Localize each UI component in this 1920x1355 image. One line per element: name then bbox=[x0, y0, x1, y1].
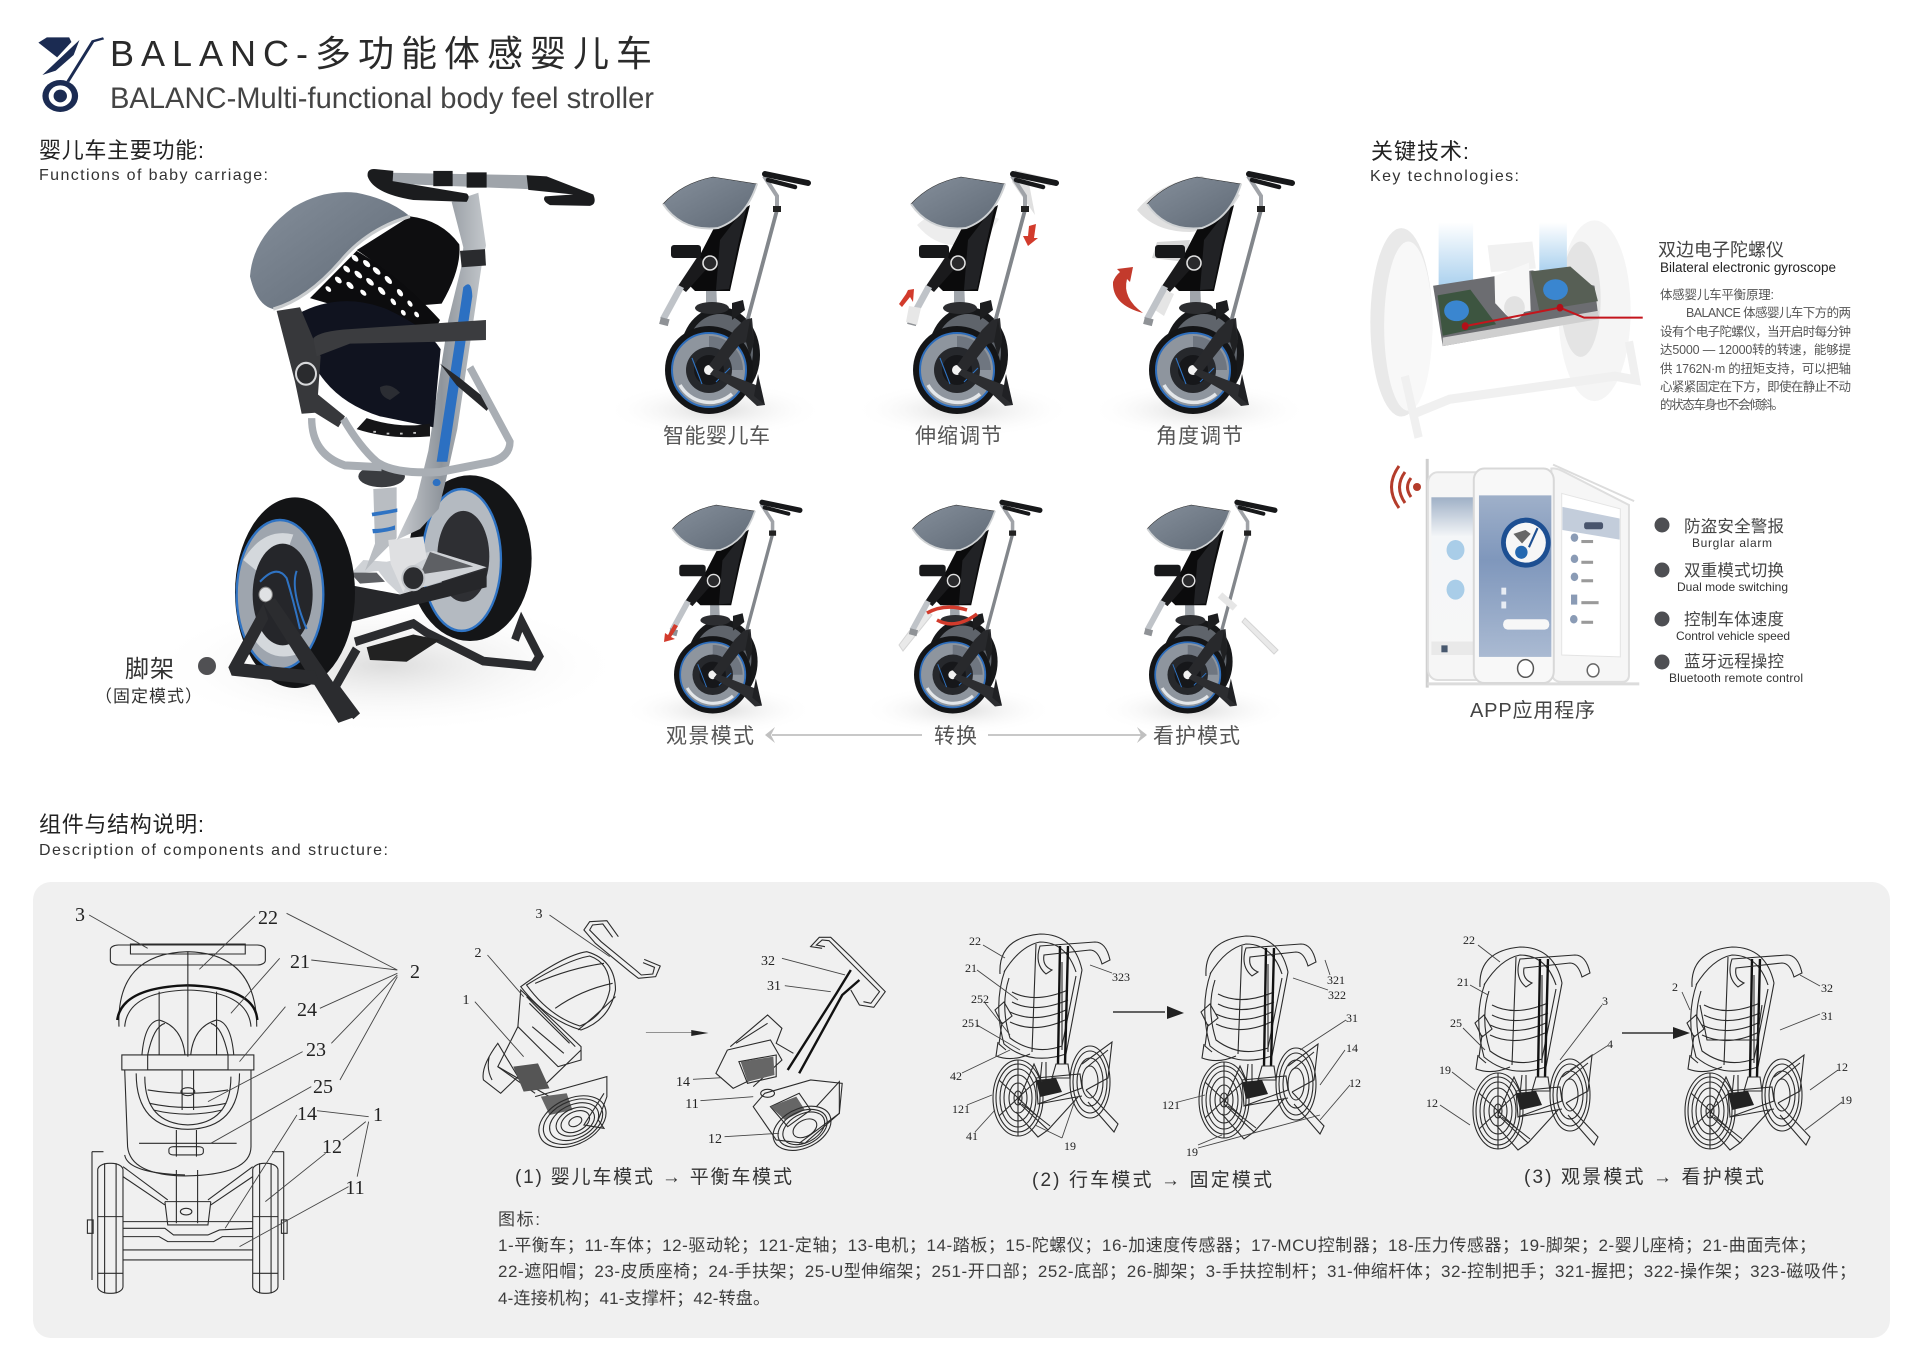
line drawing: stroller to balance mode: 3 bbox=[536, 907, 542, 922]
handlebar bbox=[368, 169, 595, 206]
main stroller illustration bbox=[147, 169, 627, 734]
panel: components and structure bbox=[33, 882, 1890, 1338]
line drawing: driving to fixed mode: 251 bbox=[962, 1016, 980, 1030]
safety bar bbox=[313, 320, 486, 356]
stroller: telescopic adjustment: 伸缩调节 bbox=[915, 425, 1002, 448]
deck bbox=[350, 551, 487, 622]
gyroscope description: 双边电子陀螺仪 bbox=[1658, 240, 1784, 260]
caption: mode 1: (1) 婴儿车模式 → 平衡车模式 bbox=[515, 1166, 792, 1188]
feature: burglar alarm: 防盗安全警报 bbox=[1684, 517, 1784, 536]
callout: kickstand: 脚架 bbox=[125, 656, 174, 683]
line drawing: driving to fixed mode: 322 bbox=[1328, 988, 1346, 1002]
line drawing: front view: 14 bbox=[297, 1103, 317, 1125]
line drawing: stroller to balance mode: 12 bbox=[708, 1132, 722, 1147]
heading: main functions: Functions of baby carriage: bbox=[39, 167, 268, 184]
line drawing: stroller to balance mode: 31 bbox=[767, 979, 781, 994]
line drawing: front view bbox=[75, 904, 420, 1293]
control block bbox=[388, 536, 427, 593]
line drawing: sightseeing to care mode: 22 bbox=[1463, 933, 1475, 947]
heading: components bbox=[39, 812, 388, 859]
line drawing: front view: 23 bbox=[306, 1039, 326, 1061]
line drawing: driving to fixed mode: 252 bbox=[971, 992, 989, 1006]
seat shell bbox=[277, 307, 492, 427]
stroller: angle adjustment: 角度调节 bbox=[1156, 425, 1243, 448]
line drawing: front view: 11 bbox=[345, 1177, 365, 1199]
stroller: smart mode: 智能婴儿车 bbox=[663, 425, 770, 448]
stroller: conversion bbox=[861, 502, 1055, 748]
stroller: conversion: 转换 bbox=[934, 725, 977, 748]
line drawing: sightseeing to care mode: 12 bbox=[1836, 1060, 1848, 1074]
phone: center bbox=[1474, 468, 1554, 683]
line drawing: front view: 22 bbox=[258, 907, 278, 929]
front wheel bbox=[235, 497, 355, 688]
line drawing: driving to fixed mode: 19 bbox=[1186, 1145, 1198, 1159]
canopy bbox=[250, 192, 410, 309]
line drawing: stroller to balance mode: 1 bbox=[462, 993, 470, 1008]
line drawing: stroller to balance mode: 14 bbox=[676, 1075, 690, 1090]
phone: right bbox=[1551, 468, 1629, 682]
gyroscope description: 的状态车身也不会倾斜。 bbox=[1660, 397, 1784, 412]
line drawing: stroller to balance mode: 11 bbox=[685, 1097, 699, 1112]
legend: 图标: bbox=[498, 1210, 540, 1229]
stroller: telescopic adjustment bbox=[853, 170, 1073, 448]
gyroscope description: 心紧紧固定在下方，即使在静止不动 bbox=[1660, 379, 1851, 394]
heading: key technologies: 关键技术: bbox=[1371, 139, 1469, 164]
center post bbox=[358, 465, 405, 571]
line drawing: sightseeing to care mode: 2 bbox=[1672, 980, 1678, 994]
title: BALANC-Multi-functional body feel stroller bbox=[110, 82, 654, 115]
line drawing: driving to fixed mode bbox=[950, 934, 1361, 1159]
callout: kickstand: （固定模式） bbox=[95, 687, 202, 706]
feature: vehicle speed: Control vehicle speed bbox=[1676, 629, 1790, 643]
line drawing: front view: 24 bbox=[297, 999, 317, 1021]
feature: bluetooth remote bbox=[1654, 652, 1803, 685]
folding stand bbox=[228, 598, 539, 723]
line drawing: stroller to balance mode: 32 bbox=[761, 954, 775, 969]
line drawing: driving to fixed mode: 21 bbox=[965, 961, 977, 975]
line drawing: sightseeing to care mode: 12 bbox=[1426, 1096, 1438, 1110]
phone: left bbox=[1428, 472, 1500, 680]
feature: dual mode switching: 双重模式切换 bbox=[1684, 561, 1784, 580]
title bbox=[110, 33, 654, 115]
line drawing: driving to fixed mode: 41 bbox=[966, 1129, 978, 1143]
line drawing: sightseeing to care mode: 31 bbox=[1821, 1009, 1833, 1023]
gyroscope description: Bilateral electronic gyroscope bbox=[1660, 260, 1836, 275]
legend bbox=[498, 1210, 1856, 1308]
caption: mode 2: (2) 行车模式 → 固定模式 bbox=[1032, 1169, 1272, 1191]
legend: 4-连接机构；41-支撑杆；42-转盘。 bbox=[498, 1289, 770, 1308]
gyroscope description: 供 1762N·m 的扭矩支持，可以把轴 bbox=[1660, 361, 1851, 376]
gyroscope description: BALANCE 体感婴儿车下方的两 bbox=[1686, 305, 1851, 320]
callout: kickstand bbox=[95, 656, 216, 706]
heading: key technologies bbox=[1370, 139, 1519, 185]
feature: bluetooth remote: Bluetooth remote control bbox=[1669, 671, 1803, 685]
line drawing: front view: 12 bbox=[322, 1136, 342, 1158]
stroller: sightseeing mode bbox=[621, 502, 815, 748]
stroller: care mode: 看护模式 bbox=[1153, 725, 1240, 748]
line drawing: sightseeing to care mode bbox=[1426, 933, 1852, 1150]
caption: mode 3: (3) 观景模式 → 看护模式 bbox=[1524, 1166, 1764, 1188]
arrow: to sightseeing mode bbox=[765, 727, 922, 743]
line drawing: front view: 21 bbox=[290, 951, 310, 973]
line drawing: driving to fixed mode: 31 bbox=[1346, 1011, 1358, 1025]
gyroscope illustration bbox=[1370, 220, 1643, 438]
gyroscope description: 体感婴儿车平衡原理: bbox=[1660, 287, 1774, 302]
feature: burglar alarm: Burglar alarm bbox=[1692, 536, 1772, 550]
heading: components: Description of components and structure: bbox=[39, 842, 388, 859]
seat back and mesh bbox=[297, 216, 460, 437]
line drawing: sightseeing to care mode: 21 bbox=[1457, 975, 1469, 989]
rear wheel bbox=[408, 475, 532, 641]
feature: dual mode switching bbox=[1654, 561, 1788, 594]
legend: 1-平衡车；11-车体；12-驱动轮；121-定轴；13-电机；14-踏板；15-陀螺仪；16-加速度传感器；17-MCU控制器；18-压力传感器；19-脚架；2-婴儿座椅；21-曲面壳体； bbox=[498, 1236, 1816, 1255]
logo bbox=[38, 37, 104, 112]
line drawing: driving to fixed mode: 14 bbox=[1346, 1041, 1358, 1055]
line drawing: sightseeing to care mode: 4 bbox=[1607, 1037, 1613, 1051]
gyroscope description bbox=[1658, 240, 1851, 412]
feature: bluetooth remote: 蓝牙远程操控 bbox=[1684, 652, 1784, 671]
gyroscope description: 设有个电子陀螺仪，当开启时每分钟 bbox=[1660, 324, 1851, 339]
handle column bbox=[397, 193, 486, 540]
line drawing: stroller to balance mode bbox=[462, 907, 885, 1156]
stroller: sightseeing mode: 观景模式 bbox=[666, 725, 754, 748]
line drawing: sightseeing to care mode: 3 bbox=[1602, 994, 1608, 1008]
line drawing: front view: 2 bbox=[410, 961, 420, 983]
U frame bbox=[312, 367, 510, 472]
feature: dual mode switching: Dual mode switching bbox=[1677, 580, 1788, 594]
arrow: to care mode bbox=[988, 727, 1147, 743]
line drawing: front view: 1 bbox=[373, 1104, 383, 1126]
stroller: smart mode bbox=[605, 174, 825, 448]
stroller: care mode bbox=[1096, 502, 1290, 748]
app caption: APP应用程序 bbox=[1470, 699, 1595, 722]
line drawing: driving to fixed mode: 121 bbox=[952, 1102, 970, 1116]
legend: 22-遮阳帽；23-皮质座椅；24-手扶架；25-U型伸缩架；251-开口部；252-底部；26-脚架；3-手扶控制杆；31-伸缩杆体；32-控制把手；321-握把；322-操作架；323-磁吸件； bbox=[498, 1262, 1856, 1281]
feature: burglar alarm bbox=[1654, 517, 1784, 550]
line drawing: driving to fixed mode: 22 bbox=[969, 934, 981, 948]
line drawing: stroller to balance mode: 2 bbox=[474, 946, 482, 961]
line drawing: driving to fixed mode: 12 bbox=[1349, 1076, 1361, 1090]
title: BALANC-多功能体感婴儿车 bbox=[110, 33, 652, 74]
line drawing: front view: 3 bbox=[75, 904, 85, 926]
gyroscope description: 达5000 — 12000转的转速，能够提 bbox=[1660, 342, 1851, 357]
line drawing: driving to fixed mode: 19 bbox=[1064, 1139, 1076, 1153]
line drawing: front view: 25 bbox=[313, 1076, 333, 1098]
line drawing: sightseeing to care mode: 25 bbox=[1450, 1016, 1462, 1030]
line drawing: driving to fixed mode: 121 bbox=[1162, 1098, 1180, 1112]
line drawing: driving to fixed mode: 323 bbox=[1112, 970, 1130, 984]
line drawing: sightseeing to care mode: 19 bbox=[1840, 1093, 1852, 1107]
heading: main functions: 婴儿车主要功能: bbox=[39, 138, 204, 163]
phones: app screens bbox=[1427, 459, 1639, 688]
icon: wireless signal bbox=[1392, 466, 1421, 508]
line drawing: sightseeing to care mode: 32 bbox=[1821, 981, 1833, 995]
line drawing: driving to fixed mode: 42 bbox=[950, 1069, 962, 1083]
feature: vehicle speed bbox=[1654, 610, 1790, 643]
line drawing: driving to fixed mode: 321 bbox=[1327, 973, 1345, 987]
app feature list bbox=[1654, 517, 1803, 685]
heading: main functions bbox=[39, 138, 268, 184]
stroller: angle adjustment bbox=[1089, 174, 1309, 448]
heading: components: 组件与结构说明: bbox=[39, 812, 204, 837]
heading: key technologies: Key technologies: bbox=[1370, 168, 1519, 185]
line drawing: sightseeing to care mode: 19 bbox=[1439, 1063, 1451, 1077]
feature: vehicle speed: 控制车体速度 bbox=[1684, 610, 1784, 629]
